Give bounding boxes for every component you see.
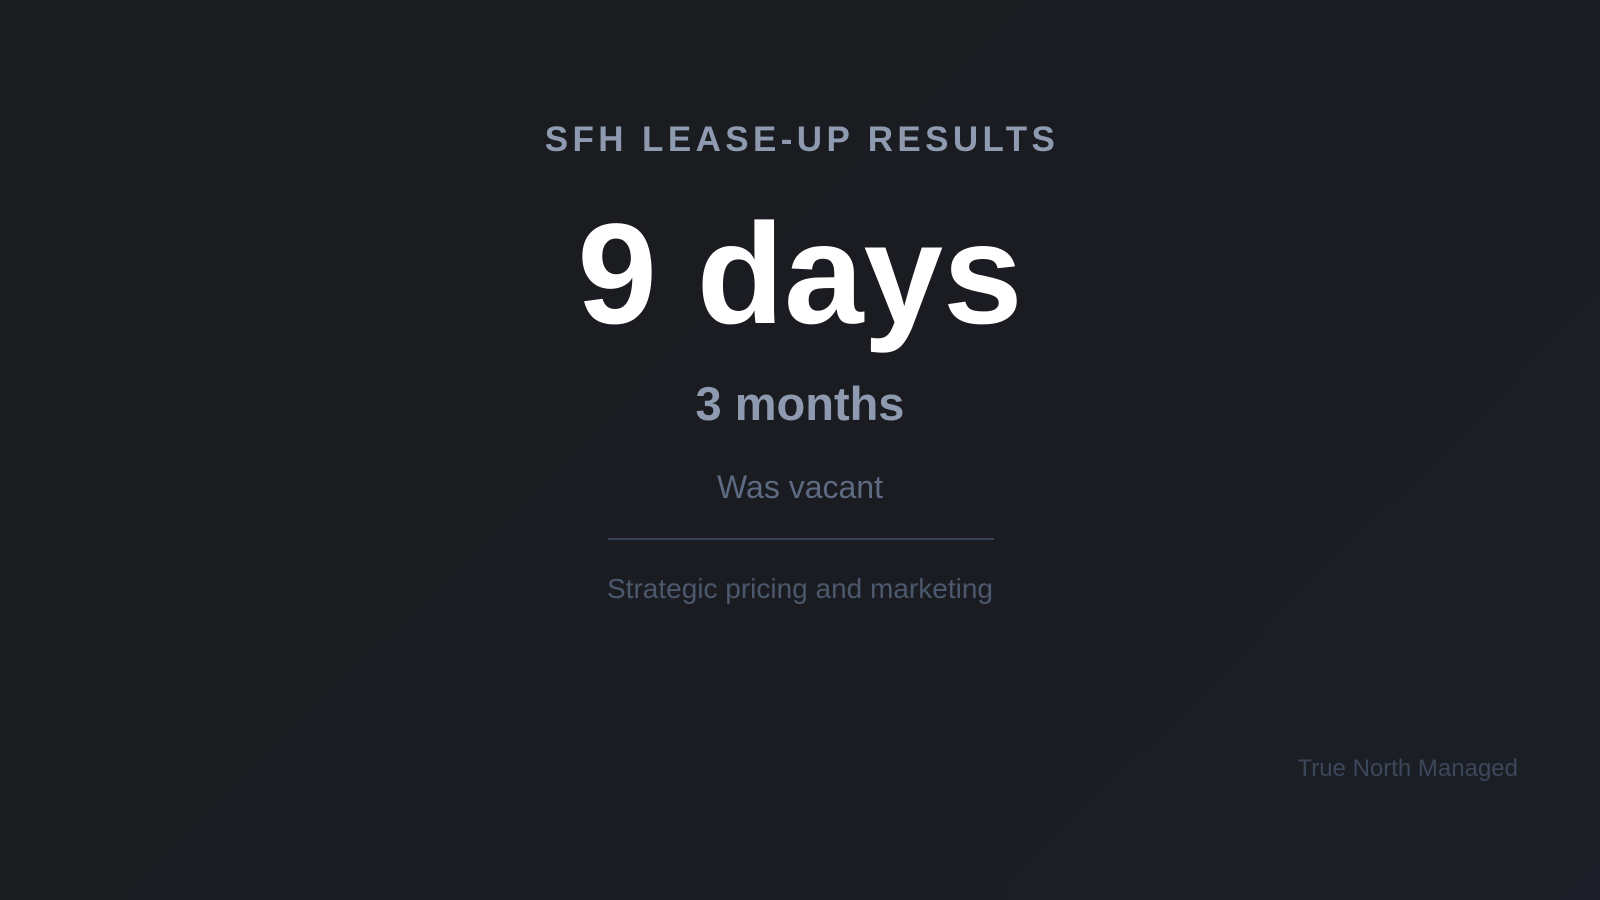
description: Strategic pricing and marketing — [607, 573, 993, 604]
label: was vacant: Was vacant — [717, 469, 883, 505]
headline stat: 9 days: 9 days — [577, 195, 1023, 354]
divider — [608, 538, 994, 540]
footer brand: True North Managed — [1297, 755, 1518, 782]
title: SFH LEASE-UP RESULTS — [545, 120, 1059, 159]
previous vacancy: 3 months: 3 months — [696, 377, 904, 430]
